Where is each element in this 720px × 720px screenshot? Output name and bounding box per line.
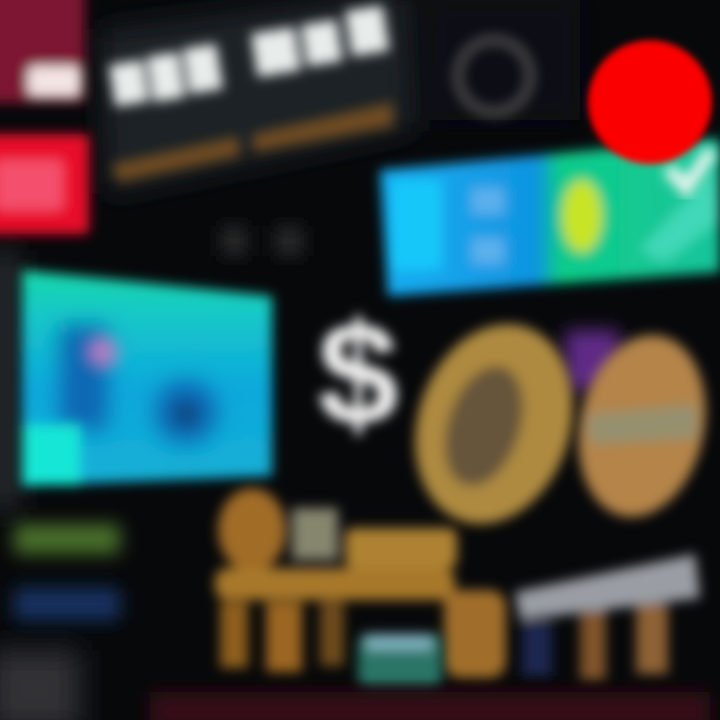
chart: silver and orange columns bbox=[515, 554, 700, 680]
text block: white sign label bbox=[28, 66, 80, 96]
icon: light blue squares bbox=[472, 188, 504, 264]
panel: blue and green banner bbox=[380, 138, 720, 296]
icon: pink marker bbox=[88, 338, 116, 366]
icon: purple backdrop bbox=[565, 330, 620, 390]
icon: gold coin right bbox=[562, 323, 720, 529]
icon: yellow dollar shape bbox=[562, 180, 602, 252]
icon: cyan tile bbox=[392, 180, 442, 270]
chart: gold coin stacks bbox=[215, 488, 506, 678]
panel: red sign left bbox=[0, 134, 89, 234]
bottom maroon strip bbox=[150, 692, 710, 720]
icon: pale green stripe bbox=[640, 170, 720, 262]
icon: green and blue bill bbox=[358, 634, 442, 686]
chart: dark blue chart marks bbox=[60, 325, 218, 444]
faint grey marks bbox=[222, 226, 302, 256]
icon: grey ring bbox=[458, 40, 530, 112]
panel: teal chart screen bbox=[22, 270, 272, 486]
icon: red circle bbox=[588, 40, 712, 164]
heading: white sign lettering bbox=[109, 5, 390, 107]
text block: orange sign lettering bbox=[112, 102, 394, 182]
icon: dark centre dot bbox=[173, 401, 199, 427]
icon: gold coin left bbox=[390, 304, 598, 544]
icon: bright cyan corner bbox=[22, 425, 80, 485]
icon: dollar sign: $ bbox=[317, 292, 399, 455]
panel: maroon sign top left bbox=[0, 0, 85, 103]
icon: coin band bbox=[586, 404, 698, 444]
icon: pale note bbox=[292, 508, 338, 560]
chart: green and blue legend blocks bbox=[14, 524, 120, 620]
icon: coin centre bbox=[431, 356, 537, 496]
text block: pink sign label bbox=[0, 160, 63, 210]
icon: white check bbox=[668, 150, 712, 188]
